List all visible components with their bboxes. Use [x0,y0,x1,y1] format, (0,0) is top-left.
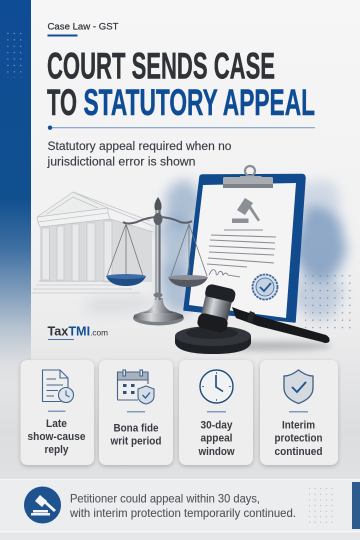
icon: calendar with shield [118,370,154,404]
subtitle: jurisdictional error is shown [47,154,196,168]
panel: interim protection continued [260,360,338,465]
card label: appeal [200,432,232,444]
scale pole [156,205,160,300]
card label: Late [46,418,67,430]
card label: continued [274,446,323,458]
gavel head [196,283,237,334]
card label: writ period [110,436,162,448]
card label: 30-day [200,420,233,432]
left pan chains [107,224,143,276]
right pan chains [171,224,207,276]
icon: clock [200,370,233,403]
clipboard clip [223,166,273,188]
dot pattern [305,272,353,332]
scale beam [123,217,192,224]
clipboard [184,166,305,322]
card label: show-cause [28,431,86,443]
conclusion text [69,492,296,520]
panel: bona fide writ period [99,360,173,465]
clipboard paper [189,183,296,318]
card label: protection [274,432,323,444]
card label [28,418,86,456]
signature [209,270,240,277]
gavel sound block [175,326,251,354]
icon: document with clock [42,370,74,402]
document text lines [207,230,276,267]
card label: Interim [282,420,315,432]
watercolor wash [80,178,346,317]
seal with check [252,274,278,300]
card label [274,420,323,458]
panel: late show-cause reply [20,360,94,465]
title [47,44,315,123]
icon: judge gavel [175,283,332,354]
subtitle [47,139,232,168]
document gavel icon [232,198,260,223]
scale base [133,298,184,326]
title divider [48,126,315,130]
conclusion text: with interim protection temporarily continued. [69,507,296,520]
card label: reply [44,444,69,456]
subtitle: Statutory appeal required when no [48,139,232,153]
icon: shield with check [284,370,313,404]
gavel handle [232,307,330,343]
right pan [168,277,208,287]
left blue band [0,0,31,540]
card label [198,420,235,458]
gavel shadow [208,341,332,351]
panel: 30-day appeal window [179,360,253,465]
icon: balance scale [106,197,208,326]
eyebrow label: case law: Case Law - GST [48,22,119,32]
left pan [106,276,146,286]
card label: Bona fide [114,422,158,434]
conclusion text: Petitioner could appeal within 30 days, [70,492,260,506]
title: TO [47,81,77,123]
icon: gavel badge [24,486,61,524]
icon: courthouse sketch [31,192,153,293]
logo: TaxTMI.com: TaxTMI.com [48,324,108,338]
panel: conclusion strip [0,479,360,532]
clipboard board [184,174,305,322]
card label: window [198,446,235,458]
blue tab [352,482,360,529]
card label [110,422,162,448]
